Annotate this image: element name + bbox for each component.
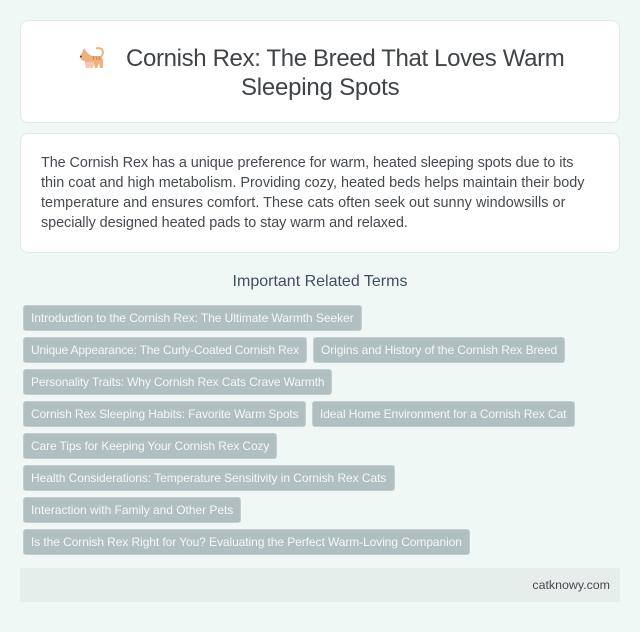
tag: Personality Traits: Why Cornish Rex Cats Crave Warmth bbox=[31, 375, 324, 389]
text block: description: The Cornish Rex has a unique preference for warm, heated sleeping spots due to its bbox=[41, 155, 573, 171]
tag: Is the Cornish Rex Right for You? Evaluating the Perfect Warm-Loving Companion bbox=[31, 535, 462, 549]
tag: Interaction with Family and Other Pets bbox=[31, 503, 233, 517]
tag: Care Tips for Keeping Your Cornish Rex Cozy bbox=[31, 439, 269, 453]
tag bbox=[23, 465, 395, 491]
tag bbox=[313, 337, 565, 363]
tag: Origins and History of the Cornish Rex Breed bbox=[321, 343, 557, 357]
tag bbox=[23, 529, 470, 555]
heading: related terms: Important Related Terms bbox=[233, 273, 407, 290]
panel: title card bbox=[20, 20, 620, 123]
text block: description: thin coat and high metabolism. Providing cozy, heated beds helps maintain their body bbox=[41, 175, 584, 191]
heading: Sleeping Spots bbox=[241, 74, 399, 101]
tag bbox=[23, 369, 332, 395]
heading bbox=[126, 45, 564, 101]
tag list bbox=[23, 305, 575, 555]
tag bbox=[23, 337, 307, 363]
panel: description bbox=[20, 133, 620, 253]
tag bbox=[23, 433, 277, 459]
footer text: catknowy.com bbox=[532, 578, 610, 592]
text block: description bbox=[41, 155, 584, 231]
text block: description: temperature and ensures comfort. These cats often seek out sunny windowsills or bbox=[41, 195, 565, 211]
tag: Cornish Rex Sleeping Habits: Favorite Warm Spots bbox=[31, 407, 299, 421]
tag bbox=[23, 305, 362, 331]
icon: cat bbox=[80, 47, 104, 68]
tag bbox=[312, 401, 575, 427]
tag bbox=[23, 497, 241, 523]
tag: Unique Appearance: The Curly-Coated Cornish Rex bbox=[31, 343, 299, 357]
tag: Ideal Home Environment for a Cornish Rex Cat bbox=[320, 407, 566, 421]
text block: description: specially designed heated pads to stay warm and relaxed. bbox=[41, 215, 408, 231]
tag: Introduction to the Cornish Rex: The Ultimate Warmth Seeker bbox=[31, 311, 354, 325]
tag: Health Considerations: Temperature Sensitivity in Cornish Rex Cats bbox=[31, 471, 386, 485]
footer bar bbox=[20, 568, 620, 602]
tag bbox=[23, 401, 306, 427]
heading: Cornish Rex: The Breed That Loves Warm bbox=[126, 45, 564, 72]
